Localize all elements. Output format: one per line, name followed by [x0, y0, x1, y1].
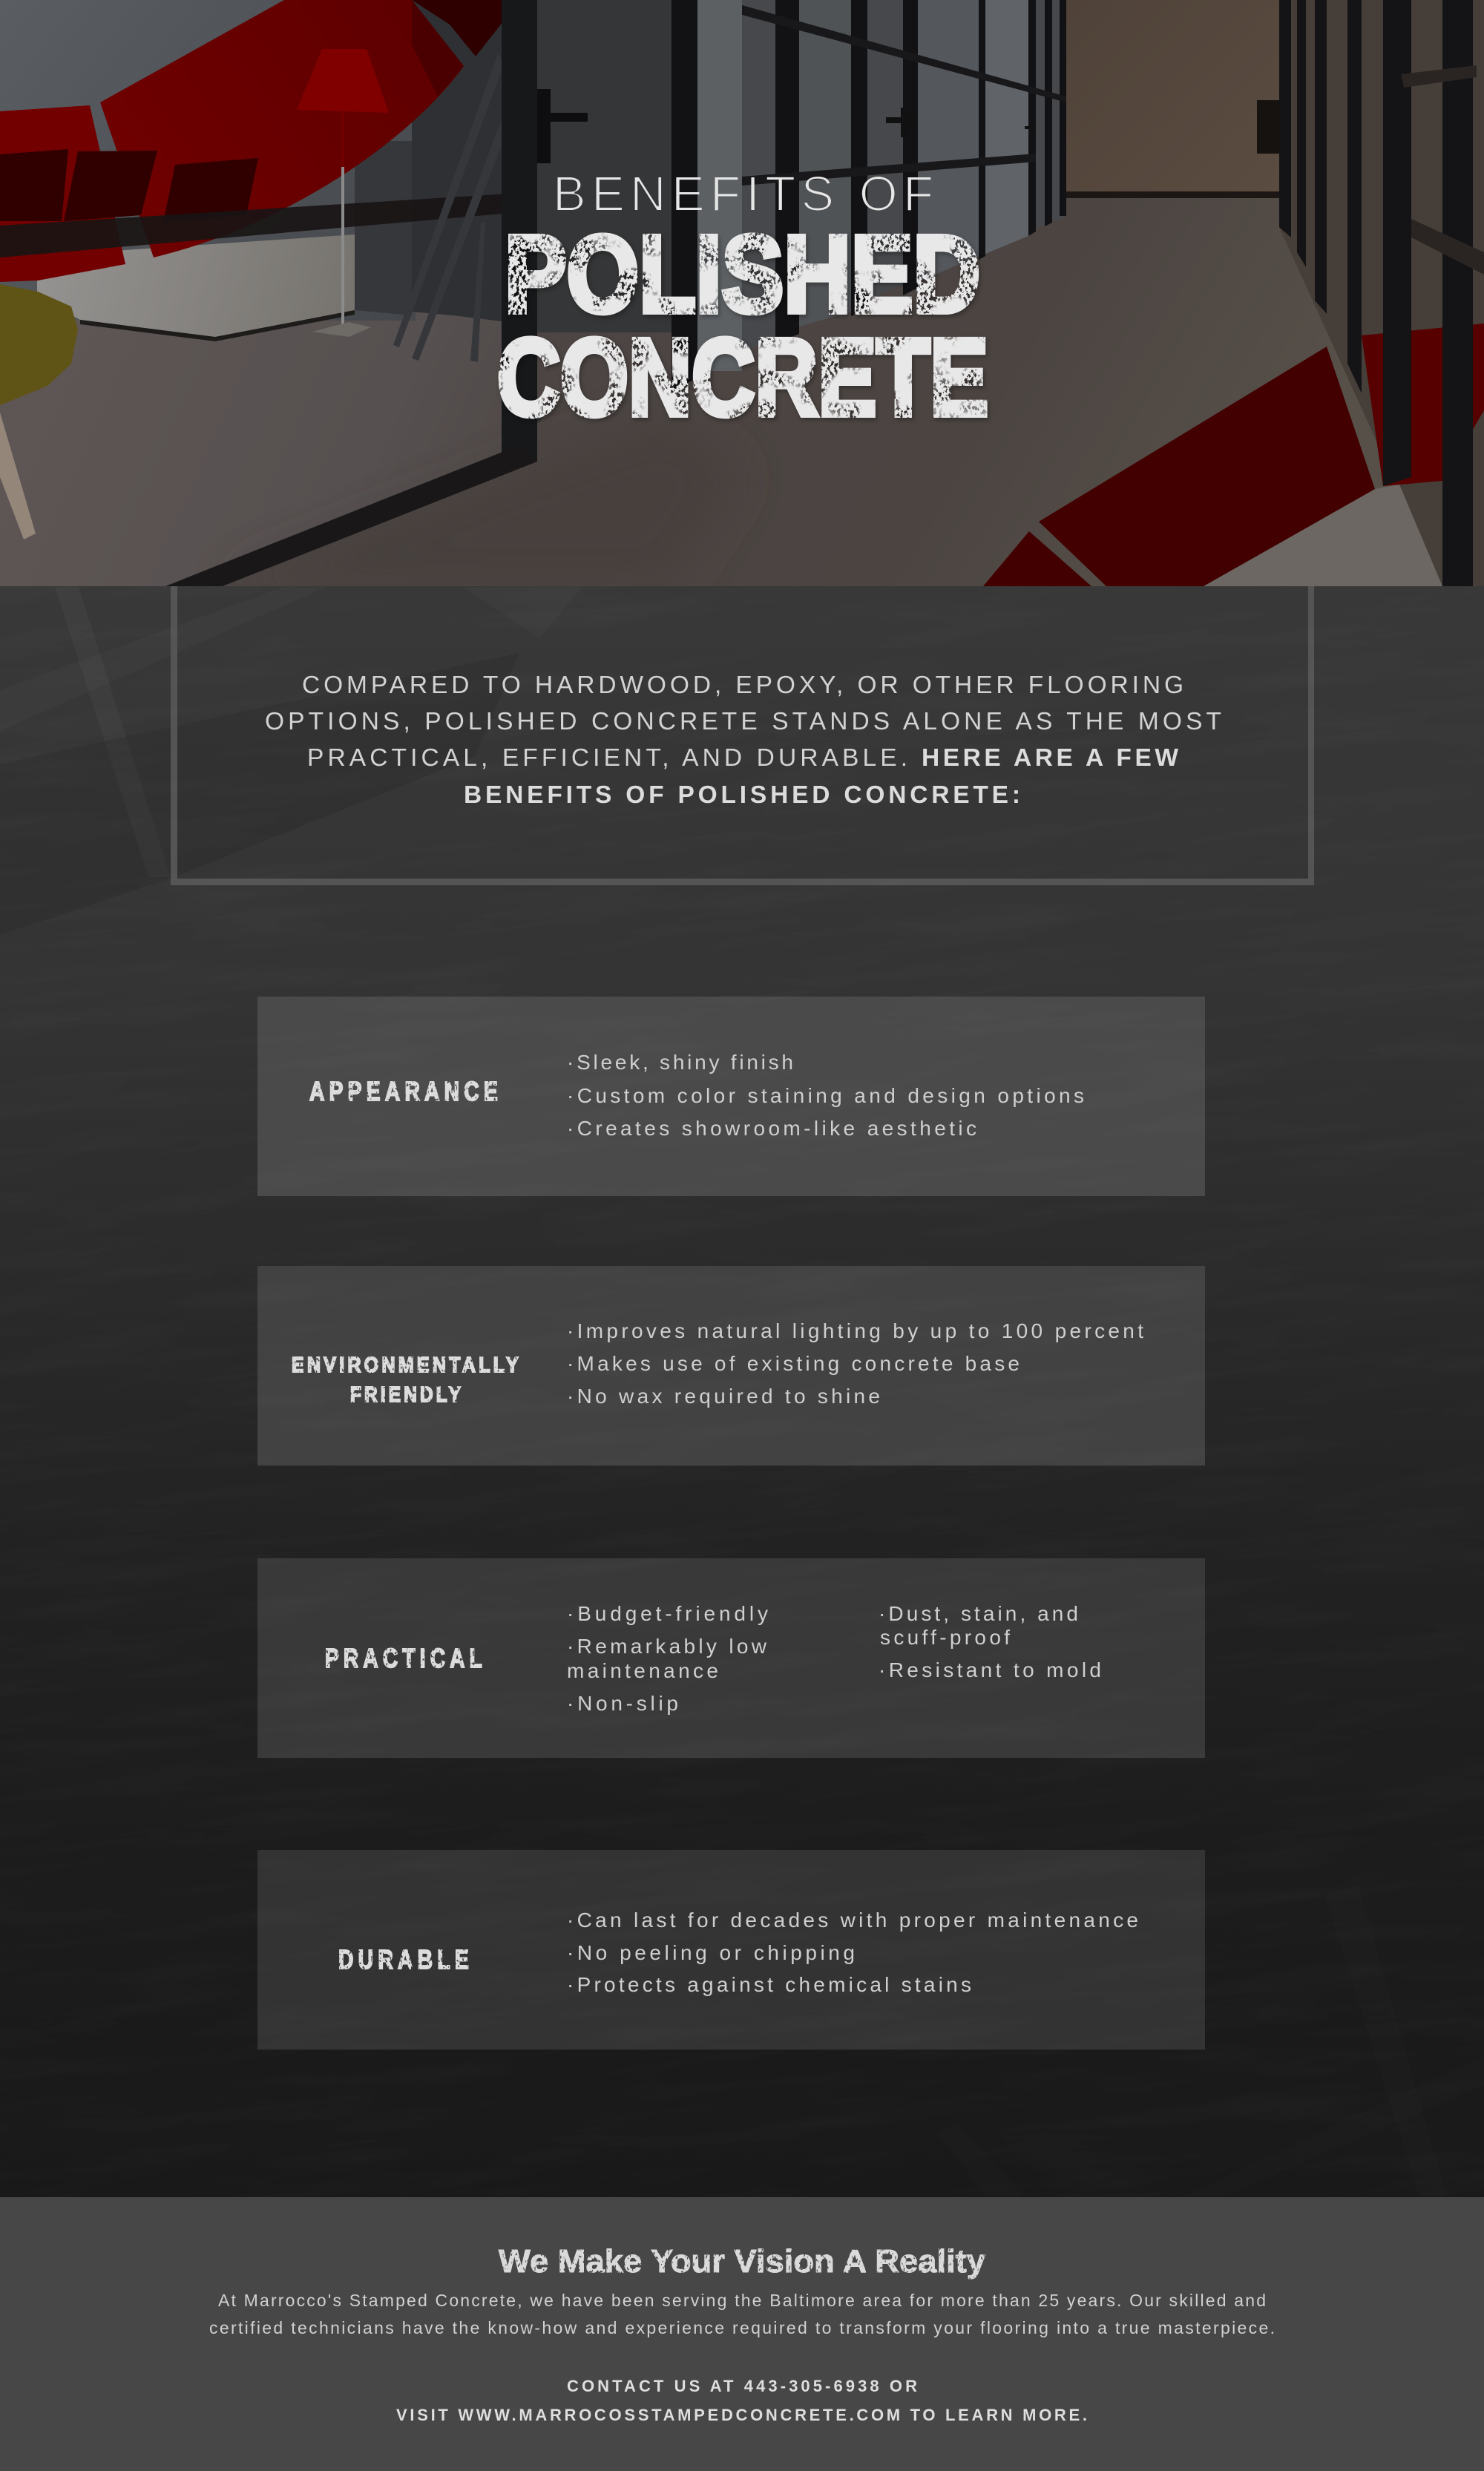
label: appearance: APPEARANCE [309, 1076, 502, 1106]
footer paragraph: certified technicians have the know-how and experience required to transform your flooring into a true masterpiece. [209, 2318, 1275, 2337]
list: practical bullets left [567, 1602, 768, 1715]
card text: appearance [309, 1051, 1084, 1140]
list: environmental bullets: ·Makes use of existing concrete base [567, 1352, 1020, 1375]
hero title [497, 166, 988, 439]
list: durable bullets: ·Protects against chemical stains [567, 1973, 971, 1996]
footer paragraph: At Marrocco's Stamped Concrete, we have been serving the Baltimore area for more than 25 years. Our skilled and [218, 2291, 1266, 2310]
label: practical: PRACTICAL [325, 1643, 487, 1673]
footer heading: We Make Your Vision A Reality [499, 2243, 986, 2280]
list: appearance bullets: ·Custom color staining and design options [567, 1084, 1084, 1107]
list: environmental bullets: ·Improves natural lighting by up to 100 percent [567, 1319, 1143, 1342]
card text: environmentally friendly [292, 1319, 1143, 1408]
intro text [265, 672, 1221, 809]
list: practical bullets left: ·Remarkably low [567, 1635, 767, 1658]
title line: benefits of: BENEFITS OF [553, 166, 933, 222]
label: environmentally friendly: ENVIRONMENTALLY [292, 1353, 522, 1377]
list: durable bullets: ·No peeling or chipping [567, 1941, 855, 1964]
list: practical bullets left: ·Non-slip [567, 1692, 678, 1715]
card: durable background [257, 1850, 1205, 2050]
list: appearance bullets [567, 1051, 1084, 1140]
intro text: OPTIONS, POLISHED CONCRETE STANDS ALONE AS THE MOST [265, 708, 1221, 735]
list: durable bullets: ·Can last for decades with proper maintenance [567, 1909, 1138, 1932]
footer paragraph [209, 2291, 1275, 2337]
footer panel [0, 2197, 1484, 2471]
card: appearance background [257, 997, 1205, 1196]
list: appearance bullets: ·Creates showroom-like aesthetic [567, 1117, 976, 1140]
list: durable bullets [567, 1909, 1138, 1996]
label: environmentally friendly [292, 1353, 522, 1407]
hero photo: glass office corridor with red floor graphics [0, 0, 1484, 586]
contact call to action: VISIT WWW.MARROCOSSTAMPEDCONCRETE.COM TO LEARN MORE. [396, 2406, 1087, 2424]
title line: concrete: CONCRETE [497, 317, 988, 439]
textured dark background [0, 586, 1484, 2197]
intro text: PRACTICAL, EFFICIENT, AND DURABLE. [307, 744, 907, 772]
label: durable: DURABLE [338, 1944, 473, 1975]
card: practical background [257, 1558, 1205, 1758]
list: practical bullets right: ·Resistant to mold [879, 1658, 1101, 1681]
list: practical bullets left: maintenance [567, 1659, 718, 1682]
list: appearance bullets: ·Sleek, shiny finish [567, 1051, 793, 1074]
list: environmental bullets [567, 1319, 1143, 1408]
intro text: COMPARED TO HARDWOOD, EPOXY, OR OTHER FLOORING [302, 672, 1183, 699]
contact call to action: CONTACT US AT 443-305-6938 OR [567, 2377, 917, 2395]
list: practical bullets right [879, 1602, 1101, 1681]
intro frame [171, 586, 1314, 885]
label: environmentally friendly: FRIENDLY [350, 1383, 464, 1407]
intro text: BENEFITS OF POLISHED CONCRETE: [464, 781, 1020, 809]
title line: polished: POLISHED [505, 214, 980, 335]
card text: durable [338, 1909, 1138, 1996]
list: practical bullets right: scuff-proof [880, 1626, 1010, 1649]
card: environmentally friendly background [257, 1266, 1205, 1466]
list: practical bullets left: ·Budget-friendly [567, 1602, 768, 1625]
list: environmental bullets: ·No wax required to shine [567, 1385, 880, 1408]
card text: practical [325, 1602, 1101, 1715]
intro text: HERE ARE A FEW [922, 744, 1178, 772]
list: practical bullets right: ·Dust, stain, and [879, 1602, 1078, 1625]
contact call to action [396, 2377, 1087, 2424]
